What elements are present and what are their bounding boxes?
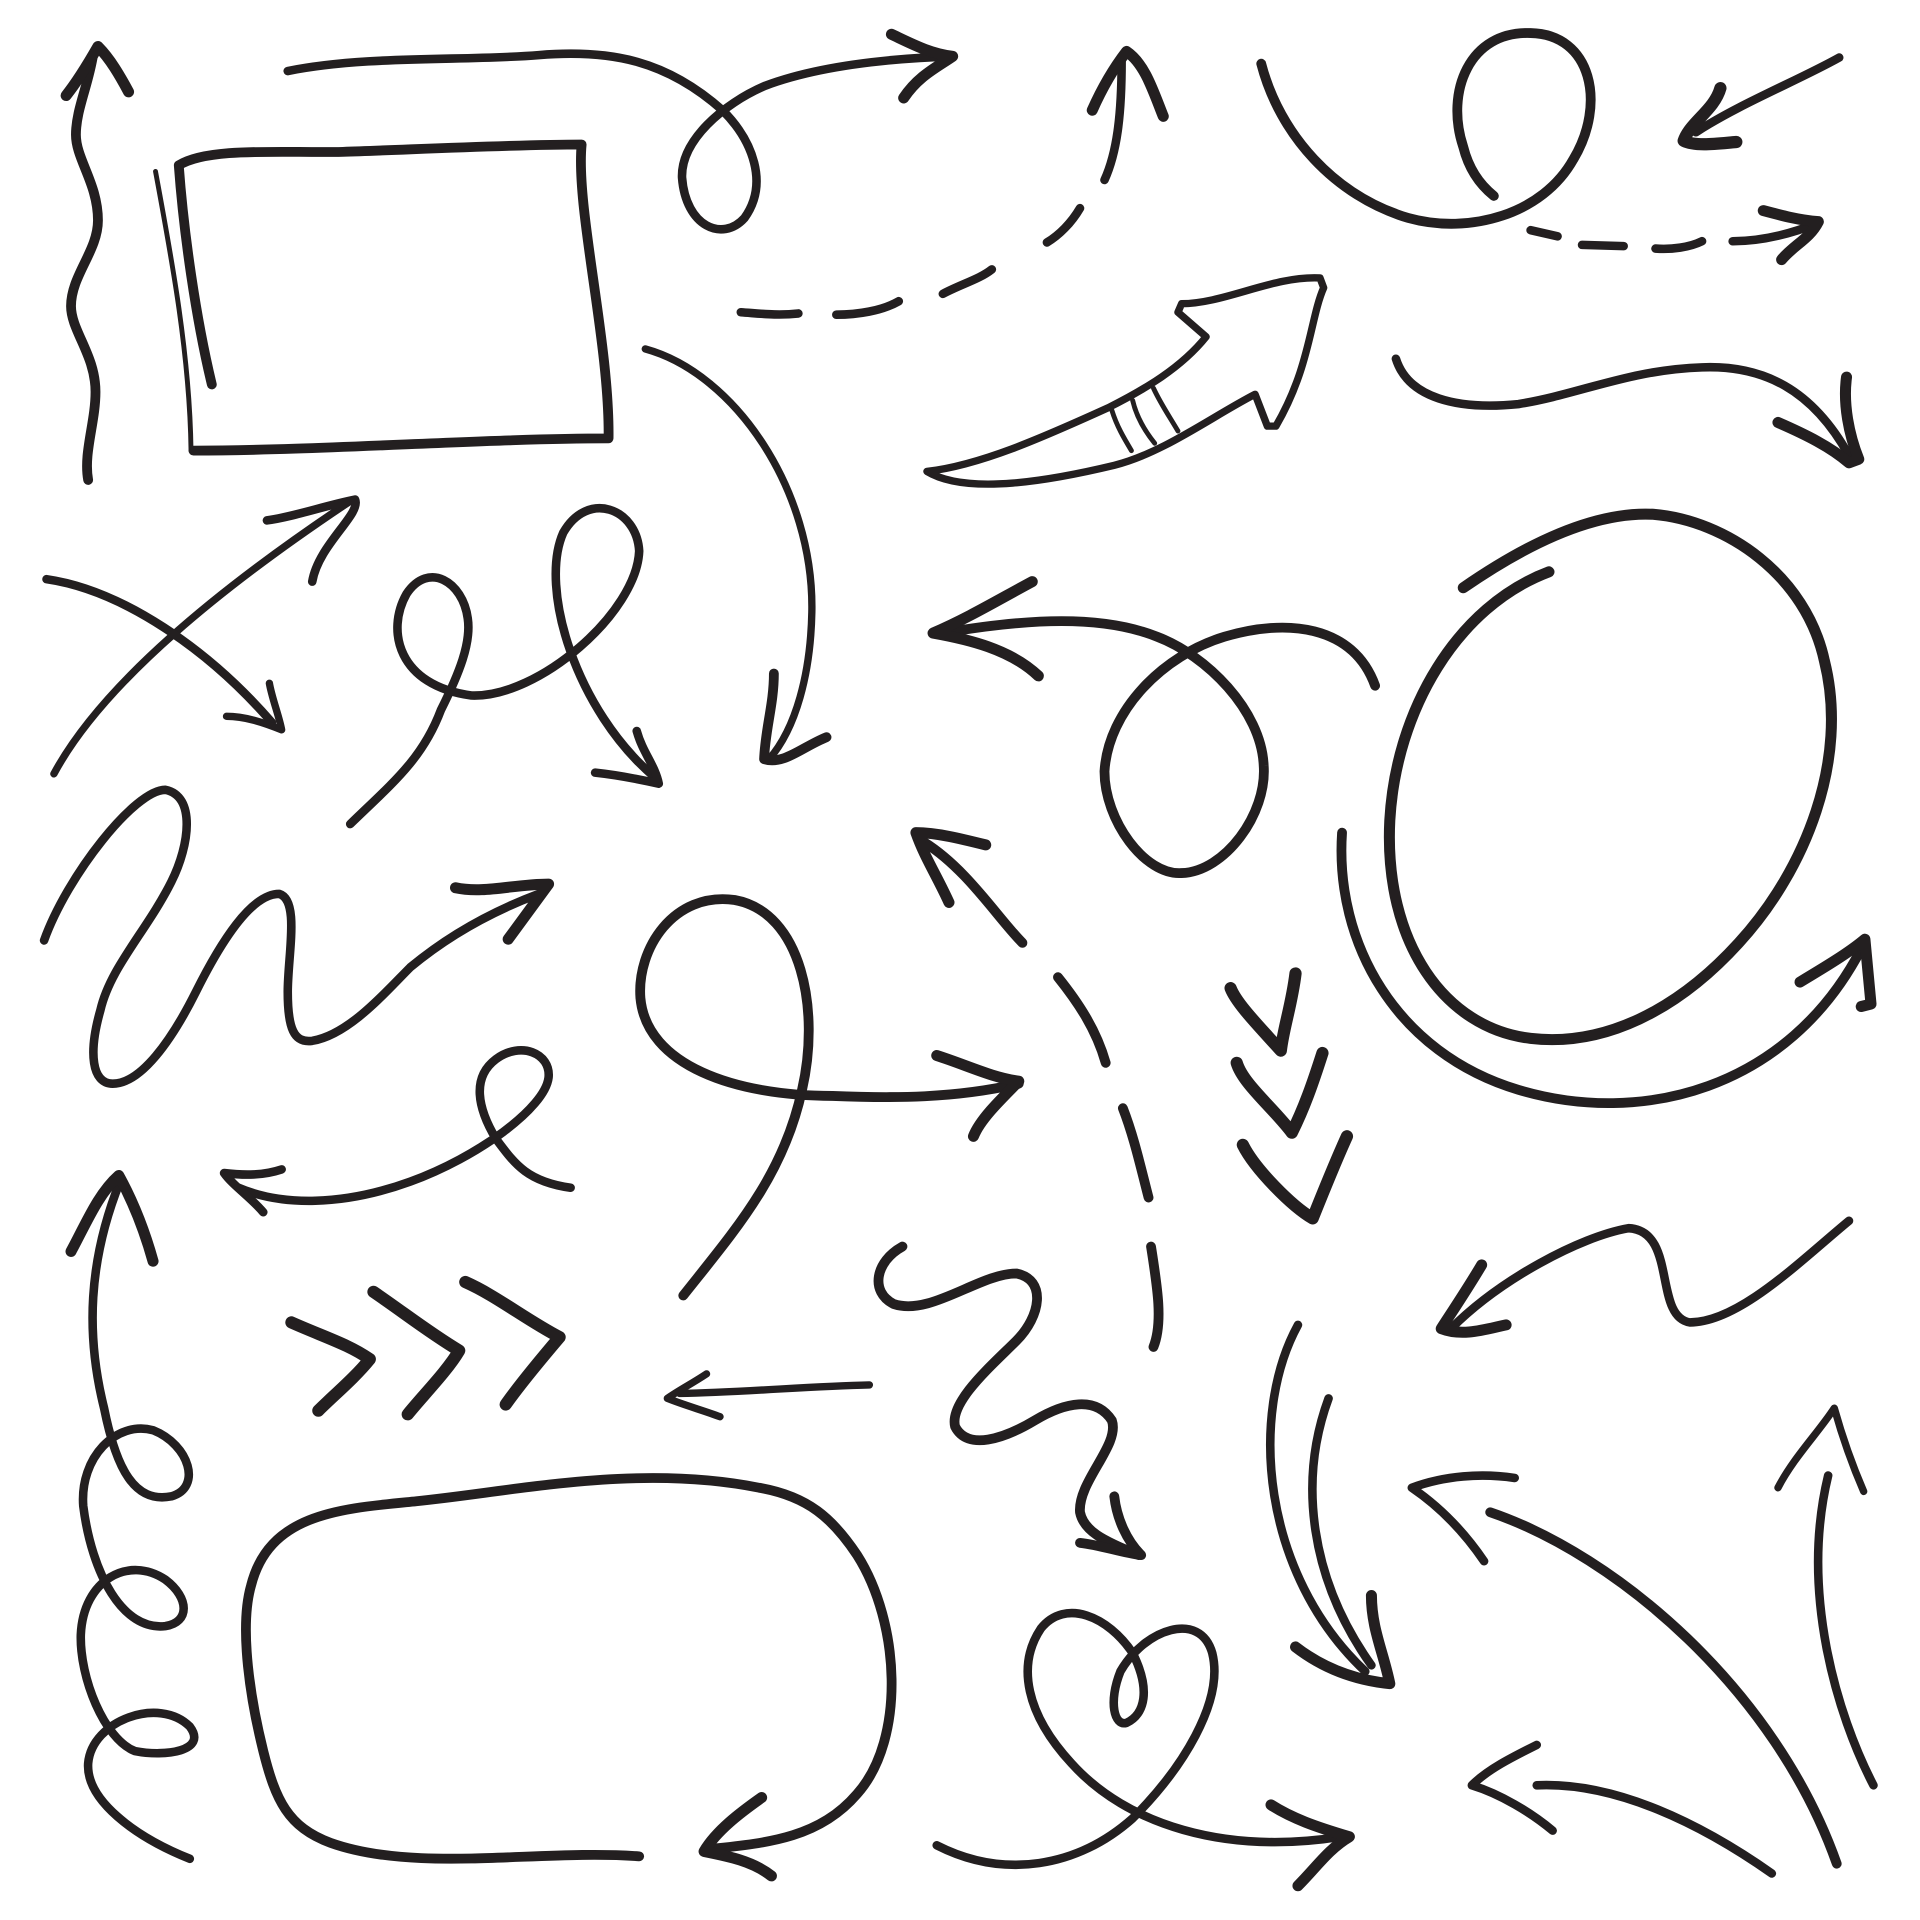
arrow: rounded frame bbox=[246, 1478, 892, 1876]
arrow: dashed up-left bbox=[916, 833, 1159, 1347]
arrow: center squiggle bbox=[878, 1247, 1141, 1555]
arrow: wavy up bbox=[66, 47, 129, 480]
arrow: top right short bbox=[1684, 58, 1839, 144]
arrow: dashed right bbox=[1531, 211, 1818, 260]
arrow: big left loop bbox=[933, 582, 1375, 873]
arrow: squiggle right bbox=[44, 790, 549, 1084]
chevrons: right bbox=[291, 1282, 560, 1414]
arrow: left spiral up bbox=[71, 1176, 194, 1859]
arrow: heart loop bbox=[937, 1613, 1349, 1886]
arrow: short left bbox=[667, 1374, 869, 1417]
arrows: crossed bbox=[47, 500, 356, 774]
circle: big ring bbox=[1389, 514, 1831, 1040]
arrow: long curve down bbox=[645, 349, 827, 760]
arrow: circle sweep bbox=[1341, 833, 1871, 1103]
arrow: dashed curve bbox=[741, 51, 1163, 315]
arrow: wave right bbox=[1396, 359, 1859, 463]
arrow: big center loop bbox=[640, 899, 1019, 1296]
arrow: hollow striped bbox=[927, 278, 1324, 484]
arrow: double loop bbox=[350, 508, 659, 824]
chevrons: down bbox=[1231, 973, 1347, 1218]
arrow: small loop left bbox=[224, 1050, 571, 1212]
arrow: bottom right bbox=[1472, 1745, 1772, 1873]
arrow: right edge up bbox=[1778, 1408, 1873, 1785]
arrow: double curve down bbox=[1270, 1325, 1390, 1684]
swirl: top right bbox=[1261, 33, 1591, 224]
arrow: top loop bbox=[288, 34, 953, 229]
frame: square box bbox=[156, 144, 609, 451]
arrow: wave left bbox=[1441, 1221, 1849, 1332]
arrow: big curve up-left bbox=[1412, 1476, 1837, 1864]
